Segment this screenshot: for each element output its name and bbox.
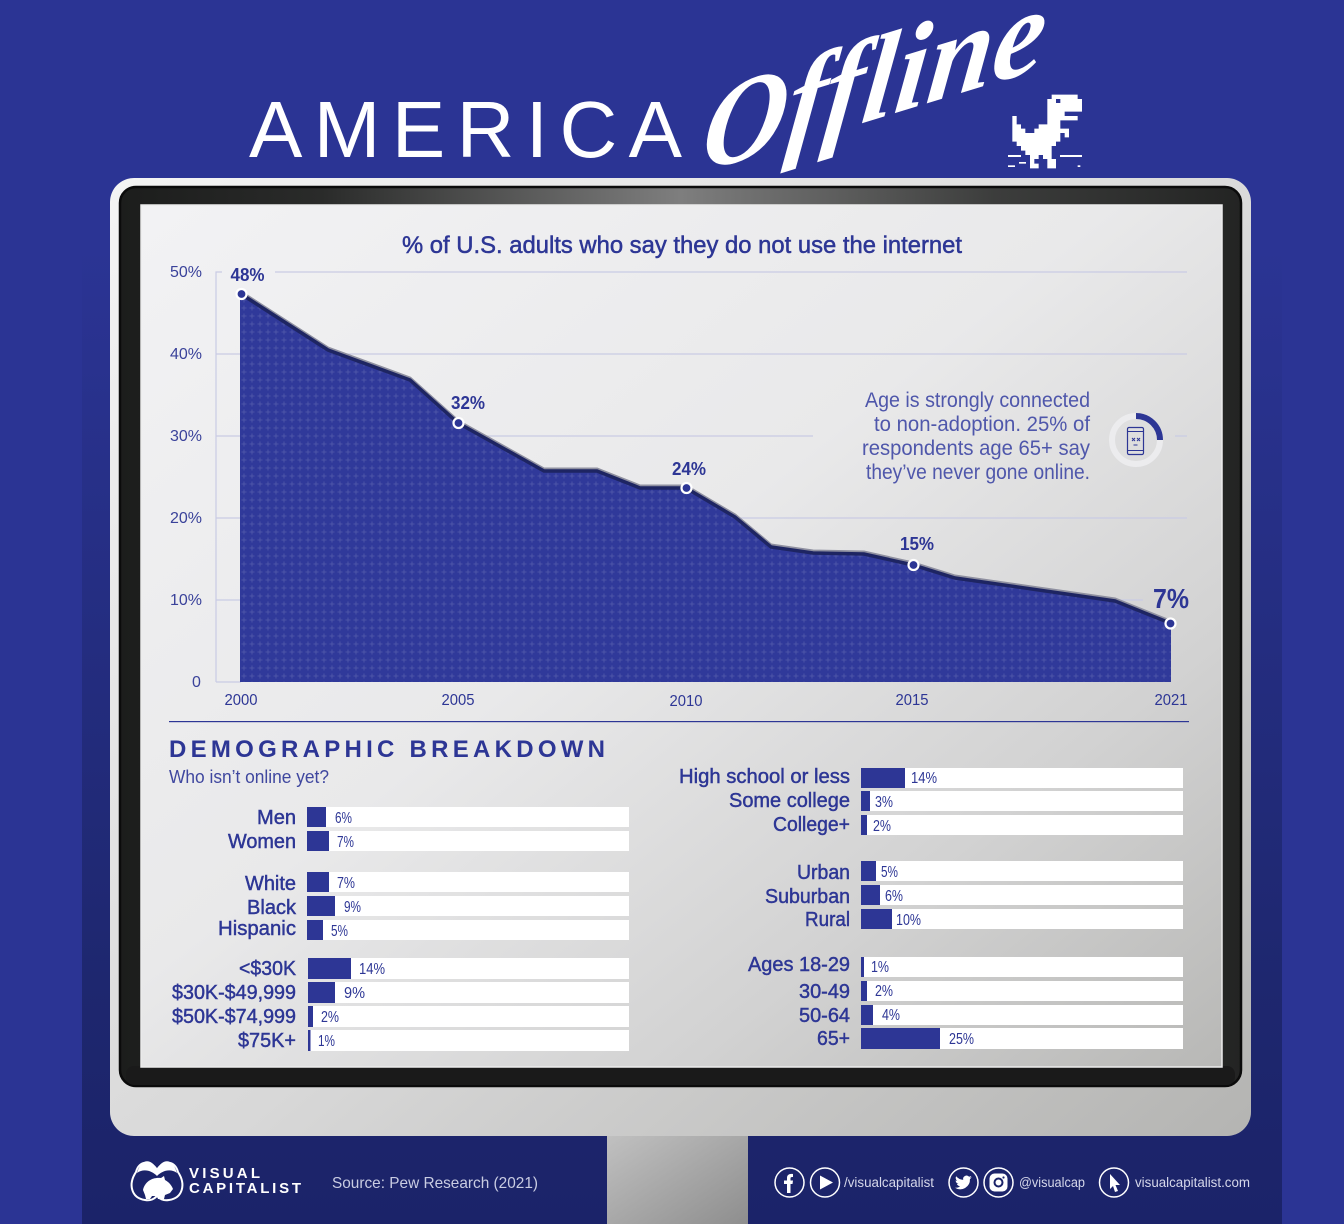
icon: instagram: [984, 1168, 1013, 1197]
icon: pixel dinosaur: [1008, 95, 1082, 168]
row: 30K to 49,999: $30K-$49,999: [172, 982, 296, 1004]
text: visualcap handle: @visualcap: [1019, 1175, 1085, 1190]
row: High school or less: [679, 766, 1183, 788]
row: Men: 6%: [335, 810, 352, 827]
row: under 30K: [239, 958, 629, 980]
row: Rural: 10%: [896, 912, 921, 929]
row: Hispanic: 5%: [331, 923, 348, 940]
data points: [236, 289, 1176, 628]
data labels: 32%: [451, 393, 485, 413]
divider: [169, 721, 1189, 722]
callout: age note: [862, 389, 1090, 484]
icon: youtube: [810, 1168, 840, 1197]
row: Black: 9%: [344, 899, 361, 916]
row: College+: College+: [773, 814, 850, 836]
row: High school or less: High school or less: [679, 766, 850, 788]
row: 30K to 49,999: [172, 982, 629, 1004]
row: 50-64: [799, 1005, 1183, 1027]
row: White: [245, 872, 629, 895]
row: 30-49: 30-49: [799, 981, 850, 1003]
row: College+: [773, 814, 1183, 836]
logo: Visual Capitalist: CAPITALIST: [189, 1180, 301, 1197]
row: 75K plus: [238, 1030, 629, 1052]
x axis years: [224, 692, 1188, 710]
row: Women: Women: [228, 831, 296, 853]
text: website: visualcapitalist.com: [1135, 1175, 1250, 1190]
row: 75K plus: 1%: [318, 1033, 335, 1050]
bars: right column: [679, 766, 1183, 1050]
row: 30K to 49,999: 9%: [344, 985, 365, 1002]
icon: twitter: [949, 1168, 978, 1197]
row: Black: [247, 896, 629, 919]
row: Urban: Urban: [797, 862, 850, 884]
x axis years: 2015: [896, 692, 929, 709]
row: 50K to 74,999: $50K-$74,999: [172, 1006, 296, 1028]
chart heading: % of U.S. adults who say they do not use the internet: [402, 232, 962, 259]
row: 30-49: [799, 981, 1183, 1003]
y axis labels: 20%: [170, 510, 202, 527]
callout: age note: to non-adoption. 25% of: [874, 413, 1090, 436]
data labels: 48%: [230, 265, 264, 285]
icon: cursor: [1100, 1168, 1128, 1197]
y axis labels: [170, 264, 202, 691]
row: 30-49: 2%: [875, 983, 893, 1000]
trend line: [241, 294, 1170, 623]
screen: [141, 205, 1222, 1067]
row: Men: Men: [257, 807, 296, 829]
data labels: 7%: [1153, 583, 1189, 614]
callout: age note: respondents age 65+ say: [862, 437, 1090, 460]
row: White: 7%: [337, 875, 355, 892]
subheading: Who isn’t online yet?: [169, 767, 329, 787]
row: under 30K: 14%: [359, 961, 385, 978]
icon: phone in progress ring: [1112, 416, 1160, 464]
row: 50K to 74,999: 2%: [321, 1009, 339, 1026]
row: Women: 7%: [337, 834, 354, 851]
x axis years: 2010: [670, 693, 703, 710]
row: 50-64: 4%: [882, 1007, 900, 1024]
row: Suburban: 6%: [885, 888, 903, 905]
area fill: [240, 294, 1171, 682]
bars: left column: [172, 807, 629, 1052]
y axis labels: 40%: [170, 346, 202, 363]
x axis years: 2000: [224, 692, 258, 709]
logo: Visual Capitalist: [132, 1161, 301, 1200]
social links: [775, 1168, 1250, 1197]
data labels: [230, 265, 1189, 614]
source: Source: Pew Research (2021): [332, 1175, 538, 1192]
row: 65+: 65+: [817, 1028, 850, 1050]
row: Suburban: [765, 885, 1183, 908]
data labels: 24%: [672, 459, 706, 479]
row: College+: 2%: [873, 818, 891, 835]
row: 50-64: 50-64: [799, 1005, 850, 1027]
row: Urban: 5%: [881, 864, 898, 881]
x axis years: 2021: [1154, 692, 1188, 709]
y axis labels: 50%: [170, 264, 202, 281]
row: 75K plus: $75K+: [238, 1030, 296, 1052]
row: Ages 18-29: [748, 954, 1183, 977]
row: 65+: [817, 1028, 1183, 1050]
row: White: White: [245, 873, 296, 895]
row: 50K to 74,999: [172, 1006, 629, 1028]
title: America: AMERICA: [249, 85, 683, 174]
heading: demographic breakdown: DEMOGRAPHIC BREAKDOWN: [169, 736, 605, 763]
y axis labels: 30%: [170, 428, 202, 445]
y axis labels: 10%: [170, 592, 202, 609]
icon: facebook: [775, 1168, 804, 1197]
monitor lower frame: [126, 1066, 1235, 1085]
y axis labels: 0: [192, 674, 201, 691]
monitor bezel: [110, 178, 1251, 1136]
row: Men: [257, 807, 629, 829]
row: Some college: [729, 790, 1183, 812]
row: Rural: Rural: [805, 909, 850, 931]
monitor: [110, 178, 1251, 1136]
row: Some college: Some college: [729, 790, 850, 812]
row: Hispanic: [218, 918, 629, 940]
callout: age note: Age is strongly connected: [865, 389, 1090, 412]
callout: age note: they’ve never gone online.: [866, 461, 1090, 484]
row: Ages 18-29: Ages 18-29: [748, 954, 850, 976]
row: Some college: 3%: [875, 794, 893, 811]
row: Hispanic: Hispanic: [218, 918, 296, 940]
row: Women: [228, 831, 629, 853]
x axis years: 2005: [442, 692, 475, 709]
row: Urban: [797, 861, 1183, 884]
row: 65+: 25%: [949, 1031, 974, 1048]
monitor black frame: [120, 187, 1241, 1086]
logo: Visual Capitalist: VISUAL: [189, 1165, 260, 1182]
row: Rural: [805, 909, 1183, 931]
area chart: [170, 264, 1189, 710]
data labels: 15%: [900, 534, 934, 554]
row: under 30K: <$30K: [239, 958, 297, 980]
row: Ages 18-29: 1%: [871, 959, 889, 976]
trend line shadow: [241, 292, 1170, 621]
row: High school or less: 14%: [911, 770, 937, 787]
row: Black: Black: [247, 897, 297, 919]
text: visualcapitalist handle: /visualcapitalist: [844, 1175, 934, 1190]
row: Suburban: Suburban: [765, 886, 850, 908]
monitor stand: [607, 1130, 748, 1224]
